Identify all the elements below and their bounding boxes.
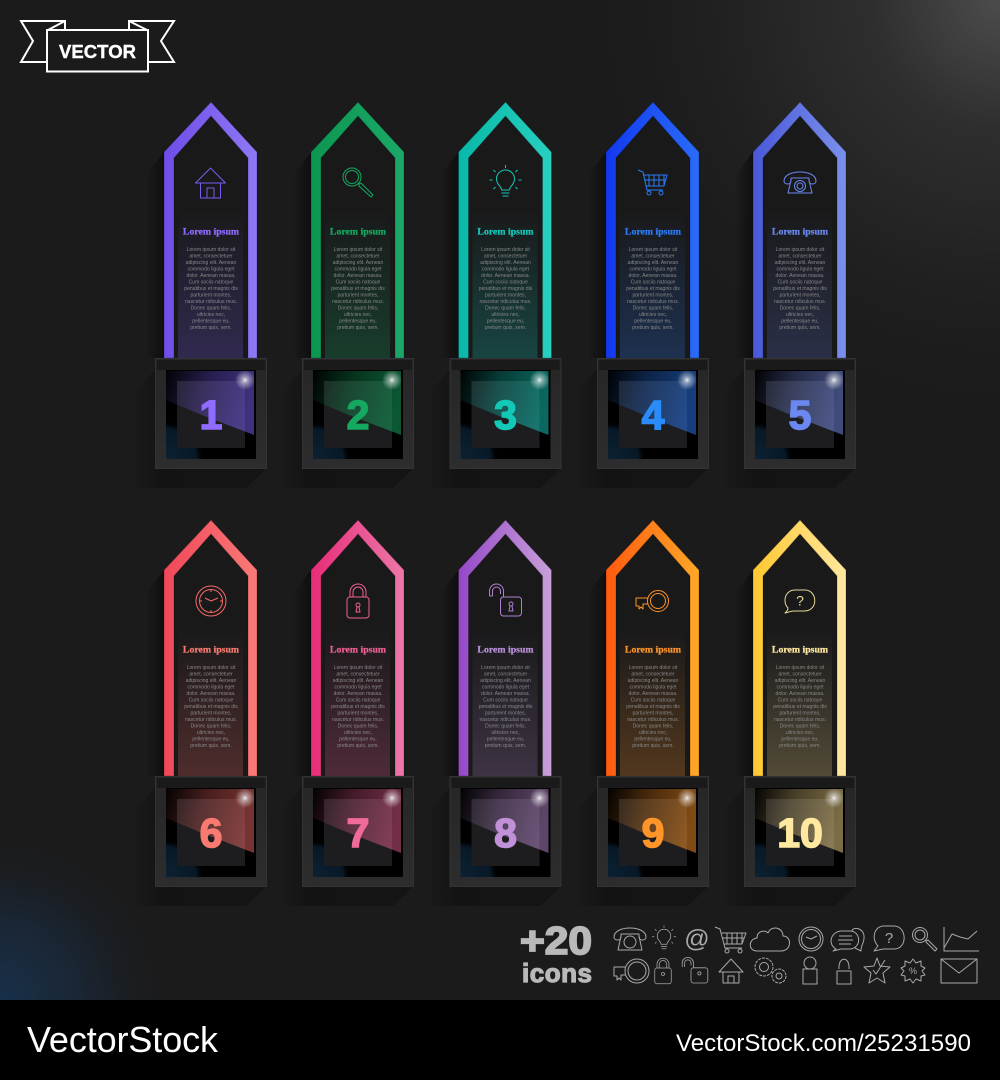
body text: Cum sociis natoque xyxy=(483,698,528,704)
body text: Lorem ipsum dolor sit xyxy=(187,665,236,671)
body text: Cum sociis natoque xyxy=(631,280,676,286)
body text: ultricies nec, xyxy=(197,730,225,736)
card 1: home xyxy=(136,102,267,488)
body text: nascetur ridiculus mus. xyxy=(185,299,237,305)
body text: pretium quis, sem. xyxy=(190,743,232,749)
body text: amet, consectetuer xyxy=(336,254,380,260)
number box: 10 xyxy=(777,810,823,856)
body text: ultricies nec, xyxy=(344,312,372,318)
body text: penatibus et magnis dis xyxy=(626,704,680,710)
icon: open lock xyxy=(682,957,708,983)
number box xyxy=(598,776,708,886)
icon: woman xyxy=(837,959,851,984)
heading: Lorem ipsum xyxy=(330,644,386,656)
body text: pellentesque eu, xyxy=(634,736,672,742)
body text: pretium quis, sem. xyxy=(485,325,526,331)
card 3: idea xyxy=(430,102,562,488)
card 4: cart xyxy=(578,102,709,488)
body text: adipiscing elit. Aenean xyxy=(628,260,679,266)
+20 icons label: icons xyxy=(522,958,592,988)
body text: commodo ligula eget xyxy=(334,684,382,690)
icon: key xyxy=(614,959,649,983)
body text: pellentesque eu, xyxy=(339,318,377,324)
body text: Donec quam felis, xyxy=(338,306,378,312)
icon: home xyxy=(196,168,226,198)
body text: adipiscing elit. Aenean xyxy=(775,678,826,684)
body text: pretium quis, sem. xyxy=(190,325,232,331)
body text: pellentesque eu, xyxy=(339,736,377,742)
body text: pretium quis, sem. xyxy=(779,743,821,749)
number box xyxy=(598,358,708,468)
icon: person xyxy=(803,957,817,984)
number box: 8 xyxy=(494,810,517,856)
body text: nascetur ridiculus mus. xyxy=(774,299,826,305)
body text: Cum sociis natoque xyxy=(336,280,381,286)
number box: 1 xyxy=(200,392,222,438)
body text: pretium quis, sem. xyxy=(337,325,379,331)
number box: 5 xyxy=(789,392,811,438)
body text: commodo ligula eget xyxy=(482,266,530,272)
body text: pellentesque eu, xyxy=(192,318,230,324)
body text: penatibus et magnis dis xyxy=(479,286,533,292)
body text: Donec quam felis, xyxy=(338,724,378,730)
card 6: clock xyxy=(136,520,267,906)
card 9: key xyxy=(578,520,709,906)
body text: penatibus et magnis dis xyxy=(626,286,680,292)
body text: Donec quam felis, xyxy=(633,306,673,312)
number box xyxy=(744,358,856,468)
body text: adipiscing elit. Aenean xyxy=(628,678,679,684)
body text: commodo ligula eget xyxy=(776,266,824,272)
body text: Cum sociis natoque xyxy=(336,698,381,704)
icon: question bubble xyxy=(785,590,815,613)
body text: Lorem ipsum dolor sit xyxy=(776,247,825,253)
icon: cart xyxy=(638,170,667,195)
body text: parturient montes, xyxy=(779,292,821,298)
body text: amet, consectetuer xyxy=(778,672,822,678)
body text: adipiscing elit. Aenean xyxy=(333,678,384,684)
body text: Lorem ipsum dolor sit xyxy=(776,665,825,671)
body text: Cum sociis natoque xyxy=(631,698,676,704)
body text: amet, consectetuer xyxy=(484,254,527,260)
body text: parturient montes, xyxy=(190,292,232,298)
icon: bulb xyxy=(652,926,676,949)
number box xyxy=(302,776,414,886)
body text: penatibus et magnis dis xyxy=(331,704,385,710)
body text: nascetur ridiculus mus. xyxy=(332,299,384,305)
body text: Lorem ipsum dolor sit xyxy=(481,247,530,253)
icon: chat xyxy=(831,928,864,951)
body text: dolor. Aenean massa. xyxy=(481,691,530,697)
body text: nascetur ridiculus mus. xyxy=(627,299,679,305)
body text: parturient montes, xyxy=(632,710,674,716)
icon set xyxy=(614,925,979,984)
body text: ultricies nec, xyxy=(197,312,225,318)
body text: ultricies nec, xyxy=(491,312,520,318)
body text: Lorem ipsum dolor sit xyxy=(334,665,383,671)
icon: telephone xyxy=(614,928,646,950)
body text: commodo ligula eget xyxy=(776,684,824,690)
body text: pellentesque eu, xyxy=(634,318,672,324)
icon: burst xyxy=(901,959,925,983)
body text: ultricies nec, xyxy=(786,730,814,736)
heading: Lorem ipsum xyxy=(330,226,386,238)
body text: ultricies nec, xyxy=(344,730,372,736)
icon: lock xyxy=(347,584,369,618)
body text: Donec quam felis, xyxy=(633,724,673,730)
body text: ultricies nec, xyxy=(639,730,667,736)
body text: amet, consectetuer xyxy=(631,672,675,678)
body text: commodo ligula eget xyxy=(629,266,677,272)
body text: amet, consectetuer xyxy=(484,672,527,678)
body text: Lorem ipsum dolor sit xyxy=(629,665,678,671)
body text: amet, consectetuer xyxy=(336,672,380,678)
body text: Lorem ipsum dolor sit xyxy=(334,247,383,253)
body text: nascetur ridiculus mus. xyxy=(627,717,679,723)
body text: ultricies nec, xyxy=(786,312,814,318)
body text: commodo ligula eget xyxy=(334,266,382,272)
icon: envelope xyxy=(941,959,977,983)
icon: gears xyxy=(755,958,786,983)
body text: Cum sociis natoque xyxy=(189,280,234,286)
body text: parturient montes, xyxy=(632,292,674,298)
body text: Donec quam felis, xyxy=(780,306,820,312)
number box: 6 xyxy=(200,810,222,856)
heading: Lorem ipsum xyxy=(772,644,828,656)
heading: Lorem ipsum xyxy=(625,644,681,656)
body text: pellentesque eu, xyxy=(487,318,524,324)
number box xyxy=(302,358,414,468)
number box xyxy=(450,776,561,886)
body text: penatibus et magnis dis xyxy=(331,286,385,292)
icon: magnifier xyxy=(343,168,373,197)
body text: ultricies nec, xyxy=(491,730,520,736)
body text: dolor. Aenean massa. xyxy=(186,691,236,697)
body text: pellentesque eu, xyxy=(781,736,819,742)
icon: key xyxy=(636,590,668,612)
body text: Cum sociis natoque xyxy=(778,280,823,286)
heading: Lorem ipsum xyxy=(477,226,534,238)
number box xyxy=(450,358,561,468)
icon: star xyxy=(864,958,890,983)
body text: parturient montes, xyxy=(337,292,379,298)
number box xyxy=(156,358,266,468)
icon: house xyxy=(719,959,743,983)
body text: adipiscing elit. Aenean xyxy=(775,260,826,266)
card 8: open lock xyxy=(430,520,562,906)
body text: Lorem ipsum dolor sit xyxy=(481,665,530,671)
body text: pretium quis, sem. xyxy=(485,743,526,749)
body text: pellentesque eu, xyxy=(781,318,819,324)
body text: dolor. Aenean massa. xyxy=(334,691,382,697)
icon: cart xyxy=(715,927,746,953)
body text: amet, consectetuer xyxy=(189,254,233,260)
body text: nascetur ridiculus mus. xyxy=(332,717,384,723)
icon: lock xyxy=(655,958,671,984)
body text: pellentesque eu, xyxy=(192,736,230,742)
body text: penatibus et magnis dis xyxy=(184,704,238,710)
body text: pretium quis, sem. xyxy=(632,743,674,749)
body text: Lorem ipsum dolor sit xyxy=(187,247,236,253)
icon: burst: % xyxy=(909,966,917,976)
body text: parturient montes, xyxy=(779,710,821,716)
body text: pretium quis, sem. xyxy=(779,325,821,331)
icon: question bubble xyxy=(874,926,904,951)
body text: pretium quis, sem. xyxy=(632,325,674,331)
heading: Lorem ipsum xyxy=(183,226,239,238)
body text: adipiscing elit. Aenean xyxy=(480,678,531,684)
card 5: phone xyxy=(725,102,856,488)
card 10: question xyxy=(725,520,856,906)
body text: commodo ligula eget xyxy=(187,266,235,272)
number box: 3 xyxy=(494,392,517,438)
footer bar xyxy=(0,1000,1000,1080)
icon: clock xyxy=(799,927,823,951)
body text: Donec quam felis, xyxy=(191,724,231,730)
body text: Cum sociis natoque xyxy=(778,698,823,704)
body text: adipiscing elit. Aenean xyxy=(480,260,531,266)
body text: parturient montes, xyxy=(190,710,232,716)
body text: dolor. Aenean massa. xyxy=(776,691,824,697)
body text: commodo ligula eget xyxy=(629,684,677,690)
+20 icons label: +20 xyxy=(520,920,592,963)
icon: telephone xyxy=(784,172,816,193)
number box: 9 xyxy=(642,810,664,856)
body text: nascetur ridiculus mus. xyxy=(185,717,237,723)
+20 icons label xyxy=(520,920,592,988)
body text: Donec quam felis, xyxy=(485,724,526,730)
body text: commodo ligula eget xyxy=(482,684,530,690)
number box xyxy=(744,776,856,886)
icon: open lock xyxy=(490,584,522,616)
body text: Cum sociis natoque xyxy=(189,698,234,704)
body text: parturient montes, xyxy=(337,710,379,716)
body text: nascetur ridiculus mus. xyxy=(479,299,532,305)
body text: Donec quam felis, xyxy=(485,306,526,312)
body text: parturient montes, xyxy=(485,292,526,298)
card 7: lock xyxy=(283,520,414,906)
icon: cloud xyxy=(750,928,790,951)
body text: dolor. Aenean massa. xyxy=(628,691,678,697)
body text: adipiscing elit. Aenean xyxy=(333,260,384,266)
icon: question bubble: ? xyxy=(796,592,804,608)
body text: dolor. Aenean massa. xyxy=(334,273,382,279)
icon: at sign: @ xyxy=(684,925,710,953)
icon: clock xyxy=(196,586,226,616)
body text: ultricies nec, xyxy=(639,312,667,318)
body text: dolor. Aenean massa. xyxy=(481,273,530,279)
body text: penatibus et magnis dis xyxy=(773,286,827,292)
body text: amet, consectetuer xyxy=(778,254,822,260)
body text: dolor. Aenean massa. xyxy=(186,273,236,279)
number box: 4 xyxy=(642,392,665,438)
footer url: VectorStock.com/25231590 xyxy=(676,1030,971,1057)
body text: adipiscing elit. Aenean xyxy=(186,678,237,684)
heading: Lorem ipsum xyxy=(183,644,239,656)
number box: 2 xyxy=(347,392,369,438)
card 2: search xyxy=(283,102,414,488)
body text: amet, consectetuer xyxy=(631,254,675,260)
body text: Lorem ipsum dolor sit xyxy=(629,247,678,253)
body text: parturient montes, xyxy=(485,710,526,716)
body text: nascetur ridiculus mus. xyxy=(479,717,532,723)
icon: magnifier xyxy=(912,928,937,951)
body text: Cum sociis natoque xyxy=(483,280,528,286)
body text: penatibus et magnis dis xyxy=(773,704,827,710)
vector badge xyxy=(21,21,174,72)
number box xyxy=(156,776,266,886)
heading: Lorem ipsum xyxy=(477,644,534,656)
body text: pretium quis, sem. xyxy=(337,743,379,749)
icon: line chart xyxy=(944,927,979,951)
body text: dolor. Aenean massa. xyxy=(628,273,678,279)
body text: penatibus et magnis dis xyxy=(184,286,238,292)
body text: amet, consectetuer xyxy=(189,672,233,678)
heading: Lorem ipsum xyxy=(625,226,681,238)
heading: Lorem ipsum xyxy=(772,226,828,238)
number box: 7 xyxy=(347,810,369,856)
body text: pellentesque eu, xyxy=(487,736,524,742)
body text: penatibus et magnis dis xyxy=(479,704,533,710)
body text: Donec quam felis, xyxy=(191,306,231,312)
icon: light bulb xyxy=(490,165,522,196)
vector badge: VECTOR xyxy=(59,41,136,62)
icon: question bubble: ? xyxy=(885,930,893,947)
body text: nascetur ridiculus mus. xyxy=(774,717,826,723)
body text: dolor. Aenean massa. xyxy=(776,273,824,279)
body text: Donec quam felis, xyxy=(780,724,820,730)
body text: commodo ligula eget xyxy=(187,684,235,690)
footer brand: VectorStock xyxy=(27,1019,219,1060)
body text: adipiscing elit. Aenean xyxy=(186,260,237,266)
